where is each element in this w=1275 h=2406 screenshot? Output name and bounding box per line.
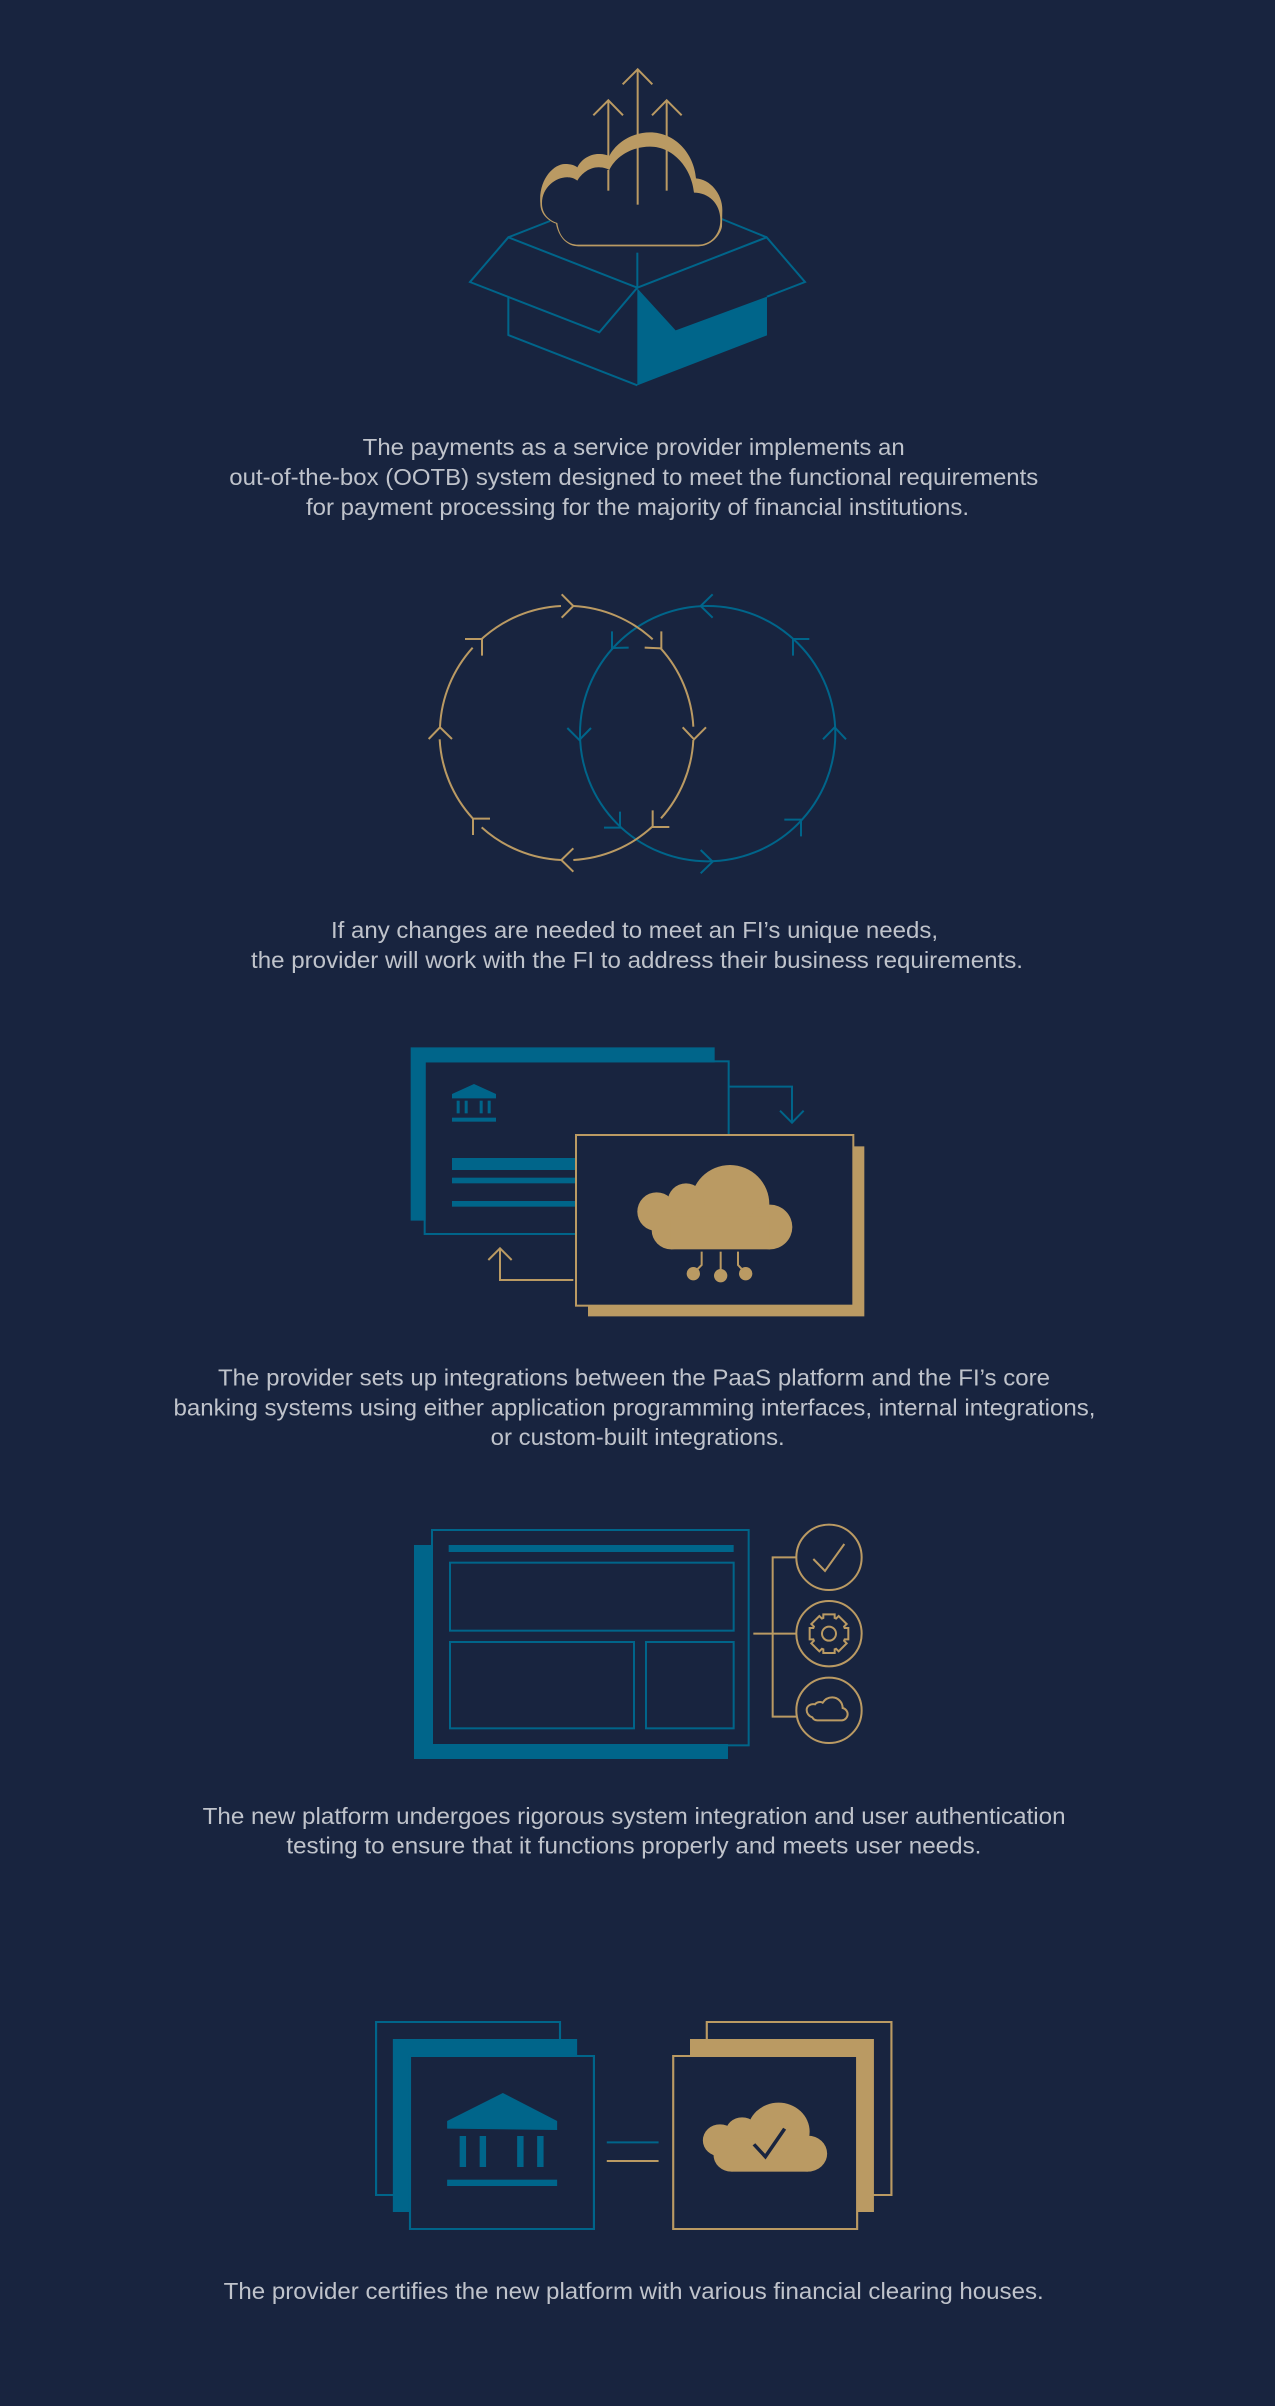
gold cycle <box>429 594 706 872</box>
icon: bank window linked to cloud window <box>411 1047 864 1316</box>
cloud page stack <box>673 2022 891 2229</box>
text block: out-of-the-box system: for payment processing for the majority of financial institutions. <box>306 494 969 520</box>
text block: integrations <box>174 1364 1096 1450</box>
dashboard window <box>414 1530 749 1759</box>
icon: gear circle <box>796 1601 862 1666</box>
blue cycle <box>567 594 846 873</box>
text block: integrations: banking systems using either application programming interfaces, internal integrations, <box>174 1394 1096 1420</box>
text block: out-of-the-box system: The payments as a service provider implements an <box>363 434 905 460</box>
icon: bank pages equal certified cloud pages <box>376 2022 891 2229</box>
icon: three upward arrows <box>593 69 682 205</box>
icon: cloud with check <box>703 2103 827 2172</box>
icon: two interlocking cycle circles <box>429 594 846 873</box>
text block: integrations: or custom-built integrations. <box>491 1424 785 1450</box>
icon: cloud circle <box>796 1678 862 1743</box>
icon: network cloud <box>637 1165 792 1282</box>
icon: cloud rising out of open box <box>470 69 805 385</box>
text block: testing: The new platform undergoes rigorous system integration and user authentication <box>203 1803 1066 1829</box>
icon: bank <box>447 2093 557 2186</box>
text block: unique needs: the provider will work with the FI to address their business requirements. <box>251 947 1023 973</box>
text block: out-of-the-box system <box>229 434 1038 520</box>
text block: out-of-the-box system: out-of-the-box (OOTB) system designed to meet the functional requirements <box>229 464 1038 490</box>
bank page stack <box>376 2022 594 2229</box>
arrow: cloud to bank <box>488 1248 573 1280</box>
text block: certification: The provider certifies the new platform with various financial clearing houses. <box>224 2278 1044 2304</box>
equals sign <box>607 2142 659 2161</box>
icon: cloud <box>540 132 722 246</box>
text block: testing <box>203 1803 1066 1858</box>
cloud window <box>576 1135 864 1316</box>
arrow: bank to cloud <box>729 1087 804 1123</box>
icon: open box <box>470 219 805 385</box>
text block: unique needs: If any changes are needed to meet an FI’s unique needs, <box>331 917 938 943</box>
connector bracket <box>753 1557 796 1717</box>
icon: check circle <box>796 1525 862 1590</box>
text block: testing: testing to ensure that it functions properly and meets user needs. <box>286 1832 981 1858</box>
text block: integrations: The provider sets up integrations between the PaaS platform and the FI’s core <box>218 1364 1050 1390</box>
bank window <box>411 1047 729 1234</box>
icon: small bank <box>452 1084 496 1122</box>
text block: unique needs <box>251 917 1023 973</box>
icon: test dashboard with checks <box>414 1525 862 1759</box>
